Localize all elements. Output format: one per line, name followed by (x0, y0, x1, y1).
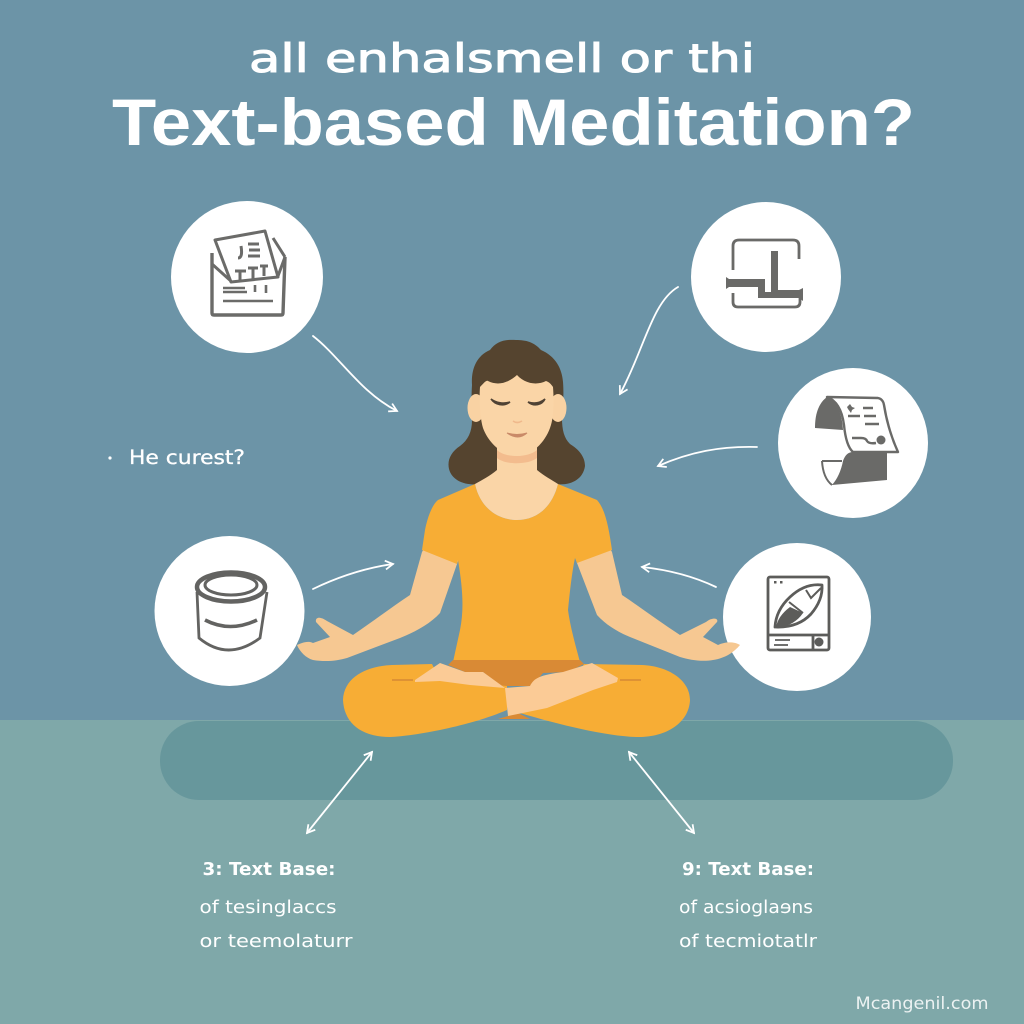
arrow: bottom left double (307, 752, 372, 833)
neck and chest (475, 445, 558, 520)
arrow: middle right (658, 447, 757, 466)
left arm and hand (297, 535, 465, 661)
mat (160, 721, 953, 800)
floor (0, 720, 1024, 1024)
arrow: top right (620, 287, 678, 394)
eyes (491, 399, 510, 405)
caption: left: or teemolaturr (200, 931, 353, 952)
ears (468, 394, 484, 422)
hair (448, 340, 585, 484)
title line 1: all enhalsmell or thi (249, 37, 755, 82)
mouth (507, 433, 527, 437)
right foot and shin (505, 663, 618, 716)
title (112, 37, 915, 159)
title line 2: Text-based Meditation? (112, 85, 915, 159)
icon: tin can (154, 536, 304, 686)
caption: left (200, 859, 353, 952)
caption text left: of tesinglaccs (200, 897, 336, 918)
arrow: lower left (313, 564, 393, 589)
caption: right (679, 859, 818, 952)
arrows (307, 287, 757, 833)
arrow: top left (313, 336, 397, 411)
icon: envelope with document (171, 201, 323, 353)
caption text right: of acsioglaɘns (679, 897, 813, 918)
neck shadow (497, 450, 537, 463)
caption: right: of tecmiotatlr (679, 931, 818, 952)
caption heading left: 3: Text Base: (202, 859, 336, 880)
left leg (343, 664, 507, 737)
arrow: bottom right double (629, 752, 694, 833)
caption heading right: 9: Text Base: (682, 859, 814, 880)
shirt (422, 484, 612, 662)
left foot (415, 663, 505, 688)
watermark: Mcangenil.com (856, 994, 988, 1014)
icon: scroll document (778, 368, 928, 518)
right arm and hand (570, 535, 740, 661)
leg creases (392, 679, 641, 681)
icon: tablet with pen (723, 543, 871, 691)
side note: He curest? (129, 446, 245, 469)
arrow: lower right (642, 567, 716, 587)
nose (513, 421, 522, 422)
shorts (448, 660, 584, 686)
right leg (520, 664, 690, 737)
icon: pipe bracket (691, 202, 841, 352)
face (480, 375, 554, 456)
figure: meditating woman (297, 340, 740, 737)
